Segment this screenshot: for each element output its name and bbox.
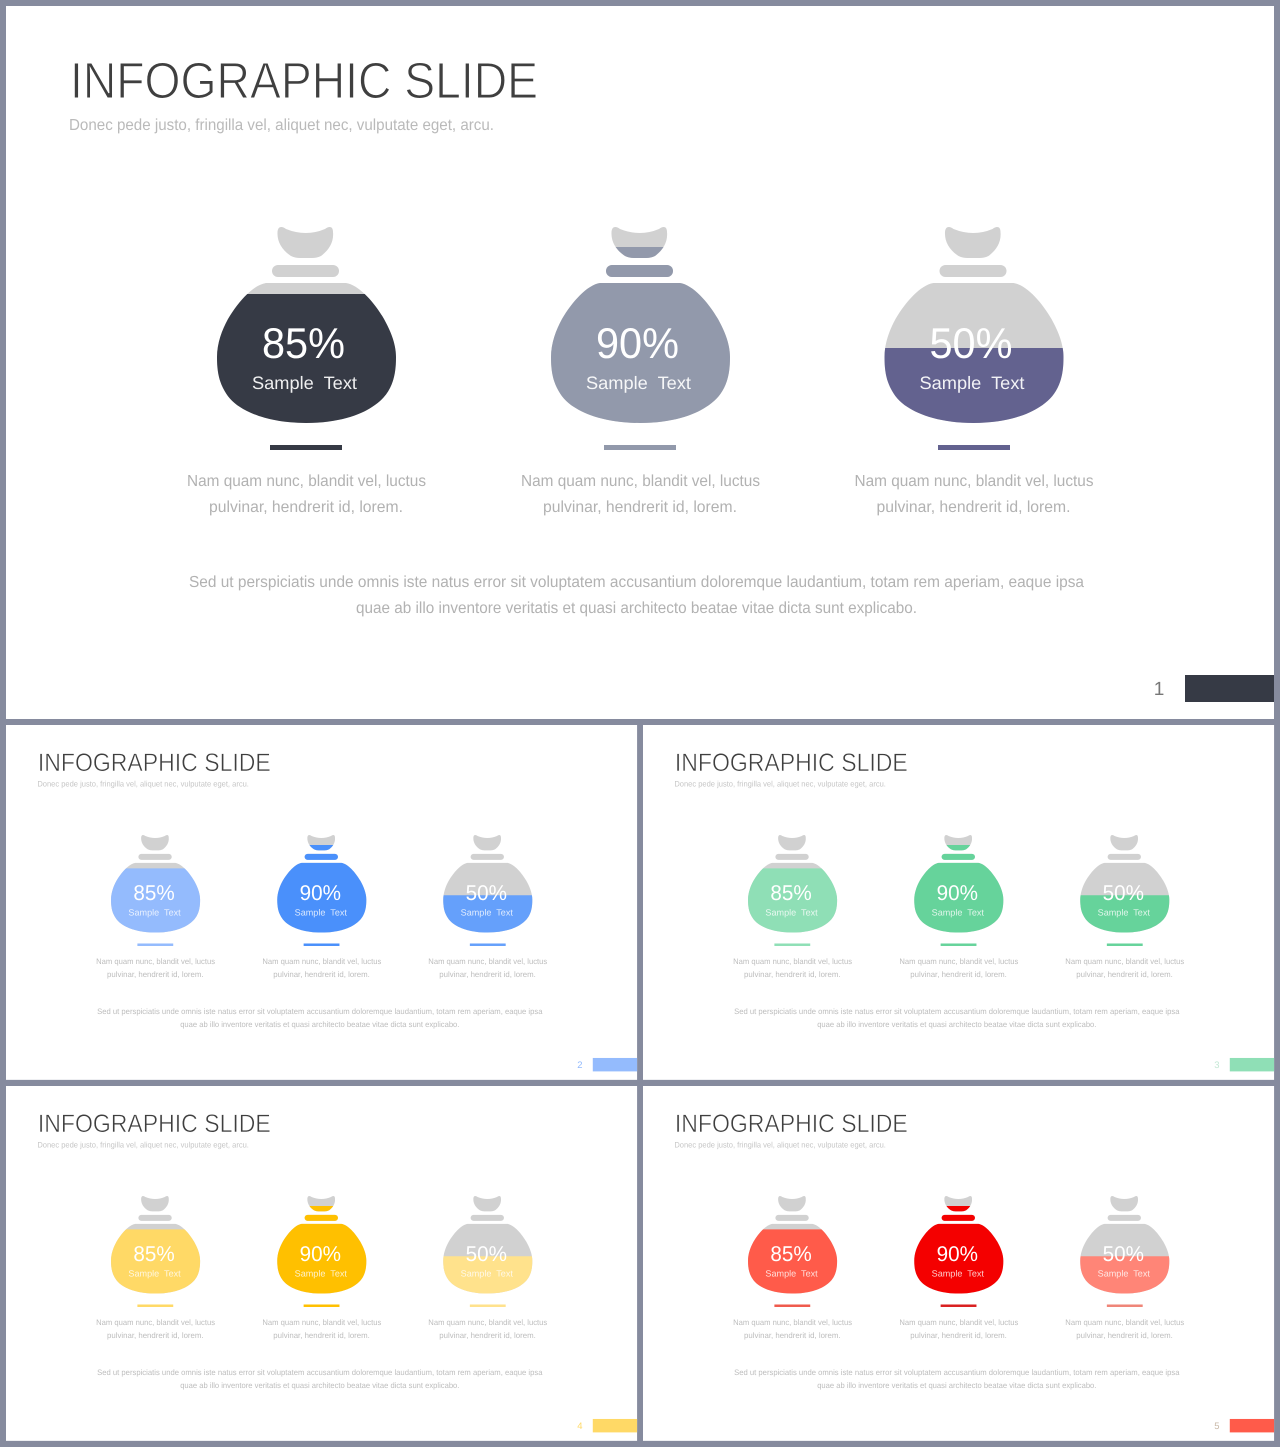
panel: slide 5 (red) bbox=[643, 1086, 1274, 1441]
body text: Sed ut perspiciatis unde omnis iste natus error sit voluptatem accusantium doloremque laudantium, totam rem aperiam, eaque ipsa bbox=[97, 1369, 543, 1377]
bag: 90%: 90% bbox=[300, 881, 341, 905]
subtitle: Donec pede justo, fringilla vel, aliquet nec, vulputate eget, arcu. bbox=[69, 117, 494, 134]
bag: 90%: Sample Text bbox=[932, 908, 984, 918]
captions: pulvinar, hendrerit id, lorem. bbox=[744, 1331, 841, 1340]
bag: 90%: Sample Text bbox=[295, 908, 347, 918]
captions: Nam quam nunc, blandit vel, luctus bbox=[1065, 1318, 1184, 1327]
page number: 2 bbox=[577, 1060, 582, 1070]
caption 1: Nam quam nunc, blandit vel, luctus bbox=[187, 473, 426, 490]
caption 1: pulvinar, hendrerit id, lorem. bbox=[209, 499, 403, 516]
caption 2: Nam quam nunc, blandit vel, luctus bbox=[521, 473, 760, 490]
captions bbox=[733, 1318, 1184, 1340]
caption 3: pulvinar, hendrerit id, lorem. bbox=[876, 499, 1070, 516]
page number: 3 bbox=[1214, 1060, 1219, 1070]
bag: 85% bbox=[111, 1196, 200, 1294]
body text: Sed ut perspiciatis unde omnis iste natus error sit voluptatem accusantium doloremque laudantium, totam rem aperiam, eaque ipsa bbox=[734, 1369, 1180, 1377]
bag: 90% bbox=[277, 1196, 366, 1294]
bag: 90%: 90% bbox=[300, 1242, 341, 1266]
caption 3: Nam quam nunc, blandit vel, luctus bbox=[854, 473, 1094, 490]
bag: 90%: Sample Text bbox=[586, 373, 691, 393]
subtitle: Donec pede justo, fringilla vel, aliquet nec, vulputate eget, arcu. bbox=[674, 1141, 886, 1150]
page bar bbox=[1185, 675, 1274, 702]
panel: slide 1 bbox=[6, 6, 1274, 719]
title: INFOGRAPHIC SLIDE bbox=[38, 1109, 271, 1137]
captions: Nam quam nunc, blandit vel, luctus bbox=[96, 1318, 215, 1327]
panel: slide 4 (yellow) bbox=[6, 1086, 637, 1441]
body text: Sed ut perspiciatis unde omnis iste natus error sit voluptatem accusantium doloremque laudantium, totam rem aperiam, eaque ipsa bbox=[734, 1008, 1180, 1016]
captions: pulvinar, hendrerit id, lorem. bbox=[107, 970, 204, 979]
body text: quae ab illo inventore veritatis et quasi architecto beatae vitae dicta sunt explicabo. bbox=[180, 1021, 459, 1029]
captions bbox=[96, 1318, 547, 1340]
captions: Nam quam nunc, blandit vel, luctus bbox=[733, 1318, 852, 1327]
bag: 85% bbox=[748, 1196, 837, 1294]
captions: pulvinar, hendrerit id, lorem. bbox=[439, 970, 536, 979]
bag: 50%: 50% bbox=[1103, 881, 1144, 905]
bag: 85% bbox=[748, 835, 837, 933]
bag: 85%: 85% bbox=[770, 881, 812, 905]
bag: 90%: Sample Text bbox=[295, 1269, 347, 1279]
body text: Sed ut perspiciatis unde omnis iste natus error sit voluptatem accusantium doloremque laudantium, totam rem aperiam, eaque ipsa bbox=[97, 1008, 543, 1016]
bag: 85%: Sample Text bbox=[252, 373, 357, 393]
bag: 50% bbox=[443, 835, 532, 933]
bag: 50% bbox=[884, 227, 1064, 423]
bag: 90%: Sample Text bbox=[932, 1269, 984, 1279]
captions: pulvinar, hendrerit id, lorem. bbox=[910, 970, 1007, 979]
caption 3 bbox=[854, 473, 1094, 516]
bag: 85%: Sample Text bbox=[128, 908, 181, 918]
panel: slide 2 (blue) bbox=[6, 725, 637, 1080]
captions: Nam quam nunc, blandit vel, luctus bbox=[1065, 957, 1184, 966]
body text: quae ab illo inventore veritatis et quasi architecto beatae vitae dicta sunt explicabo. bbox=[817, 1021, 1096, 1029]
bag: 50%: 50% bbox=[930, 320, 1012, 368]
captions: pulvinar, hendrerit id, lorem. bbox=[273, 1331, 370, 1340]
title: INFOGRAPHIC SLIDE bbox=[675, 1109, 908, 1137]
caption 2 bbox=[521, 473, 760, 516]
title: INFOGRAPHIC SLIDE bbox=[70, 52, 538, 109]
title: INFOGRAPHIC SLIDE bbox=[675, 748, 908, 776]
body text bbox=[734, 1369, 1180, 1390]
page bar bbox=[593, 1058, 637, 1071]
bag: 90%: 90% bbox=[937, 1242, 978, 1266]
page number: 4 bbox=[577, 1421, 583, 1431]
page bar bbox=[1230, 1058, 1274, 1071]
captions: pulvinar, hendrerit id, lorem. bbox=[1076, 1331, 1173, 1340]
bag: 85%: Sample Text bbox=[765, 1269, 818, 1279]
page number: 5 bbox=[1214, 1421, 1219, 1431]
bag: 90% bbox=[914, 1196, 1003, 1294]
captions bbox=[733, 957, 1184, 979]
captions: pulvinar, hendrerit id, lorem. bbox=[744, 970, 841, 979]
bag: 85%: 85% bbox=[262, 320, 345, 368]
bag: 50%: Sample Text bbox=[461, 1269, 513, 1279]
bag: 85%: 85% bbox=[770, 1242, 812, 1266]
page bar bbox=[1230, 1419, 1274, 1432]
panel: slide 3 (green) bbox=[643, 725, 1274, 1080]
title: INFOGRAPHIC SLIDE bbox=[38, 748, 271, 776]
body text bbox=[189, 574, 1084, 617]
bag: 85%: 85% bbox=[133, 881, 175, 905]
bag: 50%: 50% bbox=[466, 1242, 507, 1266]
captions: pulvinar, hendrerit id, lorem. bbox=[1076, 970, 1173, 979]
bag: 90% bbox=[551, 227, 730, 423]
captions: Nam quam nunc, blandit vel, luctus bbox=[428, 1318, 547, 1327]
bag: 90% bbox=[277, 835, 366, 933]
bag: 85% bbox=[111, 835, 200, 933]
captions bbox=[96, 957, 547, 979]
bag: 90%: 90% bbox=[596, 320, 679, 368]
captions: Nam quam nunc, blandit vel, luctus bbox=[262, 1318, 381, 1327]
captions: pulvinar, hendrerit id, lorem. bbox=[910, 1331, 1007, 1340]
body text: quae ab illo inventore veritatis et quasi architecto beatae vitae dicta sunt explicabo. bbox=[356, 600, 917, 617]
captions: Nam quam nunc, blandit vel, luctus bbox=[428, 957, 547, 966]
page bar bbox=[593, 1419, 637, 1432]
body text: quae ab illo inventore veritatis et quasi architecto beatae vitae dicta sunt explicabo. bbox=[817, 1382, 1096, 1390]
bag: 85%: 85% bbox=[133, 1242, 175, 1266]
bag: 50%: Sample Text bbox=[920, 373, 1024, 393]
bag: 85%: Sample Text bbox=[765, 908, 818, 918]
page number: 1 bbox=[1154, 679, 1164, 700]
caption 1 bbox=[187, 473, 426, 516]
body text: quae ab illo inventore veritatis et quasi architecto beatae vitae dicta sunt explicabo. bbox=[180, 1382, 459, 1390]
bag: 90%: 90% bbox=[937, 881, 978, 905]
bag: 85%: Sample Text bbox=[128, 1269, 181, 1279]
body text bbox=[97, 1008, 543, 1029]
captions: pulvinar, hendrerit id, lorem. bbox=[273, 970, 370, 979]
bag: 50%: 50% bbox=[466, 881, 507, 905]
body text: Sed ut perspiciatis unde omnis iste natus error sit voluptatem accusantium doloremque laudantium, totam rem aperiam, eaque ipsa bbox=[189, 574, 1084, 591]
captions: Nam quam nunc, blandit vel, luctus bbox=[96, 957, 215, 966]
body text bbox=[734, 1008, 1180, 1029]
captions: Nam quam nunc, blandit vel, luctus bbox=[733, 957, 852, 966]
subtitle: Donec pede justo, fringilla vel, aliquet nec, vulputate eget, arcu. bbox=[37, 1141, 249, 1150]
body text bbox=[97, 1369, 543, 1390]
bag: 50% bbox=[1080, 1196, 1169, 1294]
bag: 50%: Sample Text bbox=[1098, 908, 1150, 918]
caption 2: pulvinar, hendrerit id, lorem. bbox=[543, 499, 737, 516]
captions: pulvinar, hendrerit id, lorem. bbox=[107, 1331, 204, 1340]
captions: Nam quam nunc, blandit vel, luctus bbox=[262, 957, 381, 966]
bag: 50% bbox=[1080, 835, 1169, 933]
bag: 50%: 50% bbox=[1103, 1242, 1144, 1266]
captions: pulvinar, hendrerit id, lorem. bbox=[439, 1331, 536, 1340]
captions: Nam quam nunc, blandit vel, luctus bbox=[899, 957, 1018, 966]
bag: 50%: Sample Text bbox=[461, 908, 513, 918]
bag: 85% bbox=[217, 227, 396, 423]
bag: 50% bbox=[443, 1196, 532, 1294]
subtitle: Donec pede justo, fringilla vel, aliquet nec, vulputate eget, arcu. bbox=[37, 780, 249, 789]
bag: 50%: Sample Text bbox=[1098, 1269, 1150, 1279]
subtitle: Donec pede justo, fringilla vel, aliquet nec, vulputate eget, arcu. bbox=[674, 780, 886, 789]
captions: Nam quam nunc, blandit vel, luctus bbox=[899, 1318, 1018, 1327]
bag: 90% bbox=[914, 835, 1003, 933]
